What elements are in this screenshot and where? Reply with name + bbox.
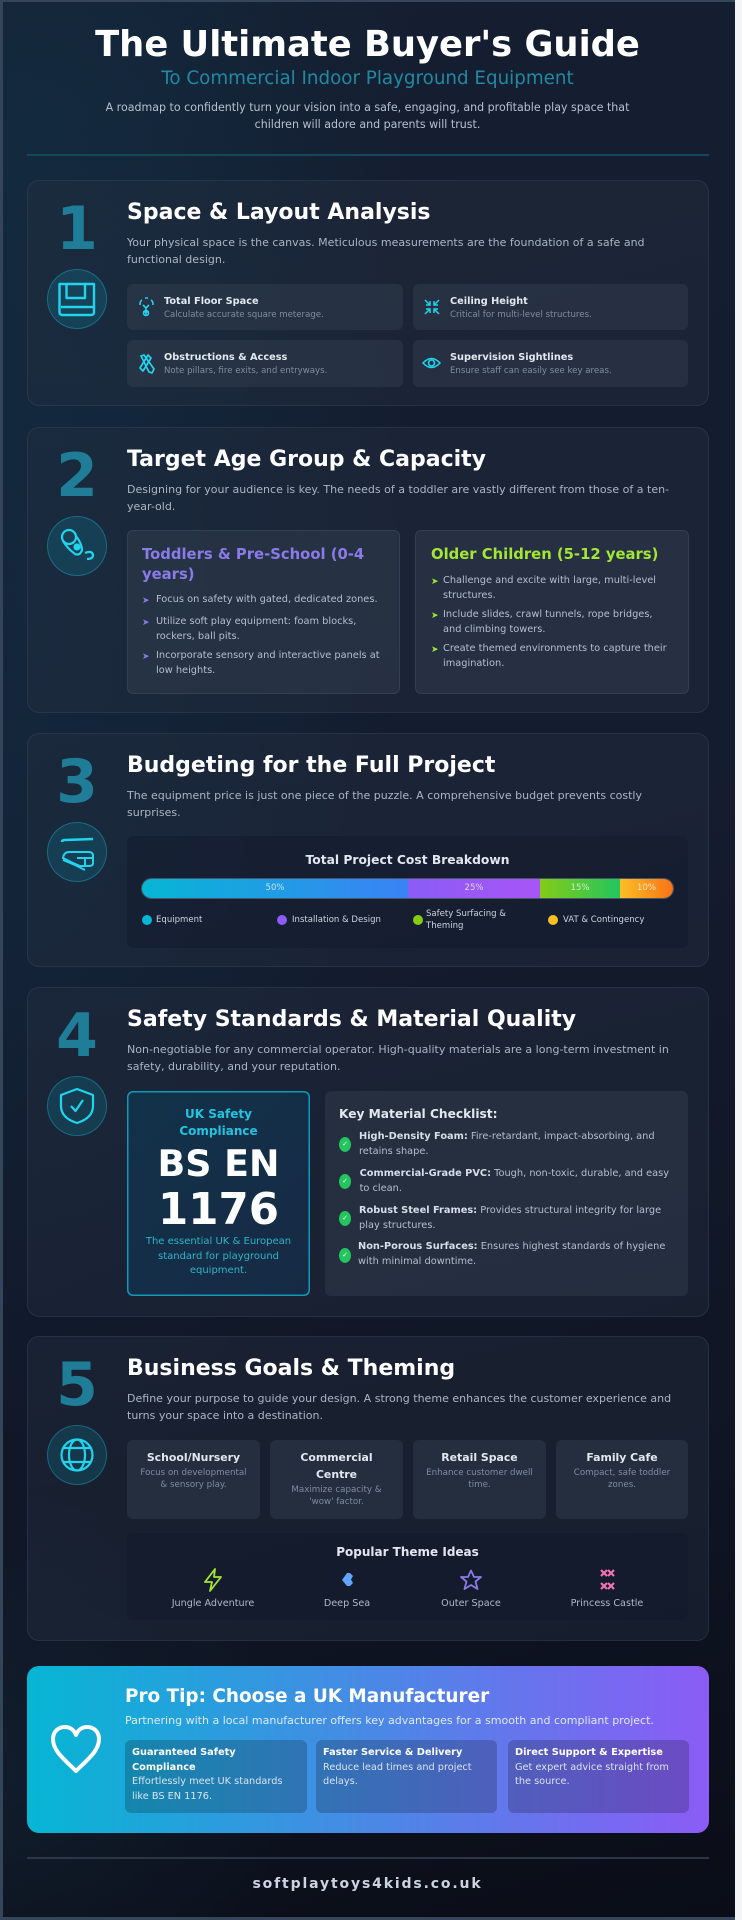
- card note: & sensory play.: [160, 1480, 227, 1490]
- card note: [140, 1468, 247, 1490]
- legend label: Installation & Design: [292, 915, 381, 925]
- legend dot: [277, 915, 287, 925]
- card text: Direct Support & Expertise: [515, 1747, 663, 1758]
- arrow: ➤: [431, 645, 439, 655]
- heading: Safety Standards & Material Quality: [127, 1007, 576, 1032]
- card: family cafe: [556, 1440, 688, 1519]
- card text: Compliance: [132, 1762, 196, 1773]
- card: ceiling height: [413, 284, 688, 330]
- legend dot: [548, 915, 558, 925]
- description: Define your purpose to guide your design. A strong theme enhances the customer experience and: [127, 1392, 671, 1404]
- card title: Commercial: [300, 1451, 373, 1464]
- card: faster service: [316, 1740, 497, 1813]
- description: The equipment price is just one piece of the puzzle. A comprehensive budget prevents costly: [127, 788, 642, 802]
- bullet: low heights.: [156, 665, 215, 676]
- step number 5: 5: [56, 1350, 98, 1420]
- note: Critical for multi-level structures.: [450, 310, 592, 320]
- bullet: [443, 609, 653, 635]
- card: older children: [415, 530, 689, 694]
- arrow: ➤: [431, 577, 439, 587]
- card title: Family Cafe: [586, 1451, 658, 1464]
- panel: key material checklist: [325, 1091, 688, 1296]
- icon: slide: [47, 822, 107, 882]
- panel: popular theme ideas: [127, 1533, 688, 1620]
- title: Total Floor Space: [164, 296, 259, 307]
- legend label: Equipment: [156, 915, 202, 925]
- step number 1: 1: [56, 194, 98, 264]
- check icon: [339, 1211, 351, 1226]
- description: turns your space into a destination.: [127, 1409, 323, 1422]
- standard name: BS EN: [158, 1142, 279, 1185]
- arrow: ➤: [431, 611, 439, 621]
- card note: Enhance customer dwell: [426, 1468, 533, 1478]
- bullet: [156, 650, 380, 676]
- icon: floor plan: [47, 269, 107, 329]
- segment: surfacing 15%: [540, 879, 620, 898]
- card text: [132, 1747, 282, 1802]
- intro text: children will adore and parents will trust.: [255, 118, 480, 131]
- bullet: [443, 643, 667, 669]
- chart title: Total Project Cost Breakdown: [306, 853, 509, 867]
- check icon: ✓: [342, 1251, 348, 1259]
- card text: [323, 1747, 472, 1787]
- icon: shield: [47, 1076, 107, 1136]
- callout note: [146, 1236, 291, 1276]
- card: obstructions: [127, 340, 403, 387]
- card title: Older Children (5-12 years): [431, 546, 658, 563]
- description: safety, durability, and your reputation.: [127, 1060, 340, 1073]
- step number 4: 4: [56, 1001, 98, 1071]
- theme label: Deep Sea: [324, 1598, 370, 1609]
- arrow: ➤: [142, 652, 150, 662]
- bullet: rockers, ball pits.: [156, 631, 240, 642]
- card: direct support: [508, 1740, 689, 1813]
- card text: Effortlessly meet UK standards: [132, 1776, 282, 1787]
- note: Note pillars, fire exits, and entryways.: [164, 366, 327, 376]
- segment: VAT 10%: [620, 879, 673, 898]
- icon: heart: [51, 1725, 101, 1774]
- icon: arrows: [424, 300, 440, 314]
- check icon: [339, 1174, 351, 1189]
- subtitle: To Commercial Indoor Playground Equipment: [161, 68, 574, 89]
- theme label: Outer Space: [441, 1598, 501, 1609]
- check icon: [339, 1248, 351, 1263]
- callout label: UK Safety: [185, 1107, 252, 1121]
- bullet: [443, 575, 656, 601]
- checklist item: [359, 1131, 655, 1157]
- card title: School/Nursery: [147, 1451, 240, 1464]
- bullet: Focus on safety with gated, dedicated zones.: [156, 594, 378, 605]
- checklist item: with minimal downtime.: [358, 1256, 476, 1267]
- card text: Guaranteed Safety: [132, 1747, 236, 1758]
- heading: Target Age Group & Capacity: [127, 447, 486, 472]
- description: surprises.: [127, 806, 181, 819]
- checklist item: Commercial-Grade PVC: Tough, non-toxic, durable, and easy: [360, 1168, 669, 1179]
- checklist item: [360, 1168, 669, 1194]
- card title: Retail Space: [441, 1451, 518, 1464]
- panel: section 1 space and layout: [27, 180, 709, 406]
- checklist title: Key Material Checklist:: [339, 1107, 498, 1121]
- card: toddlers: [127, 530, 400, 694]
- legend dot: [413, 915, 423, 925]
- card note: 'wow' factor.: [309, 1497, 364, 1507]
- description: Non-negotiable for any commercial operator. High-quality materials are a long-term investment in: [127, 1042, 669, 1056]
- icon: pacifier: [47, 516, 107, 576]
- icon: castle: [600, 1569, 615, 1590]
- check icon: ✓: [342, 1177, 348, 1185]
- check icon: [339, 1137, 351, 1152]
- card: total floor space: [127, 284, 403, 330]
- card text: [515, 1747, 669, 1787]
- title: The Ultimate Buyer's Guide: [95, 24, 640, 64]
- stacked bar: [142, 879, 673, 898]
- checklist item: Non-Porous Surfaces: Ensures highest standards of hygiene: [358, 1241, 665, 1252]
- callout: BS EN 1176: [127, 1091, 310, 1296]
- heading: Budgeting for the Full Project: [127, 753, 495, 778]
- standard number: 1176: [158, 1184, 279, 1234]
- icon: fish: [342, 1573, 353, 1586]
- card text: delays.: [323, 1776, 358, 1787]
- card note: Focus on developmental: [140, 1468, 247, 1478]
- bullet: Utilize soft play equipment: foam blocks,: [156, 616, 356, 627]
- icon: star: [460, 1570, 482, 1590]
- callout label: [179, 1107, 258, 1138]
- callout note: equipment.: [190, 1265, 247, 1276]
- theme label: Princess Castle: [571, 1598, 643, 1609]
- panel: section 3 budgeting: [27, 733, 709, 967]
- card title: [300, 1451, 373, 1481]
- tip heading: Pro Tip: Choose a UK Manufacturer: [125, 1686, 489, 1707]
- icon: bolt: [204, 1568, 222, 1592]
- card text: Reduce lead times and project: [323, 1762, 472, 1773]
- bullet: imagination.: [443, 658, 504, 669]
- icon: tools: [139, 354, 155, 374]
- bullet: and climbing towers.: [443, 624, 546, 635]
- bullet: Create themed environments to capture their: [443, 643, 667, 654]
- intro text: A roadmap to confidently turn your vision into a safe, engaging, and profitable play space that: [106, 101, 629, 114]
- legend label: [426, 909, 506, 931]
- checklist item: Robust Steel Frames: Provides structural integrity for large: [359, 1205, 661, 1216]
- card text: Faster Service & Delivery: [323, 1747, 462, 1758]
- step number 2: 2: [56, 441, 98, 511]
- checklist item: to clean.: [360, 1183, 402, 1194]
- card title: Centre: [316, 1468, 357, 1481]
- icon: eye: [422, 358, 441, 368]
- description: year-old.: [127, 500, 175, 513]
- segment: surfacing 15%: 15%: [571, 883, 589, 893]
- note: Ensure staff can easily see key areas.: [450, 366, 612, 376]
- description: [127, 1042, 669, 1073]
- segment: installation 25%: [408, 879, 540, 898]
- card text: the source.: [515, 1776, 570, 1787]
- card text: Get expert advice straight from: [515, 1762, 669, 1773]
- intro text: [106, 101, 630, 131]
- card note: zones.: [608, 1480, 636, 1490]
- theme label: Jungle Adventure: [172, 1598, 254, 1609]
- tip description: Partnering with a local manufacturer offers key advantages for a smooth and compliant project.: [125, 1714, 654, 1727]
- title: Supervision Sightlines: [450, 352, 573, 363]
- card: commercial centre: [270, 1440, 403, 1519]
- pro tip banner: [27, 1666, 709, 1833]
- description: [127, 236, 645, 266]
- heading: Business Goals & Theming: [127, 1356, 455, 1381]
- check icon: ✓: [342, 1214, 348, 1222]
- title: Obstructions & Access: [164, 352, 287, 363]
- description: Designing for your audience is key. The needs of a toddler are vastly different from those of a ten-: [127, 482, 669, 496]
- card title: Toddlers & Pre-School (0-4: [142, 546, 364, 563]
- checklist item: retains shape.: [359, 1146, 429, 1157]
- panel: section 2 target age group: [27, 427, 709, 713]
- panel: section 5 business goals: [27, 1336, 709, 1641]
- icon: floor: [139, 297, 154, 316]
- chart: total project cost breakdown: [127, 836, 688, 948]
- title: Ceiling Height: [450, 296, 528, 307]
- legend label: Safety Surfacing &: [426, 909, 506, 919]
- card note: time.: [468, 1480, 491, 1490]
- checklist item: play structures.: [359, 1220, 436, 1231]
- callout label: Compliance: [179, 1124, 258, 1138]
- check icon: ✓: [342, 1140, 348, 1148]
- description: [126, 788, 642, 819]
- footer website: softplaytoys4kids.co.uk: [252, 1876, 483, 1892]
- card note: [426, 1468, 533, 1490]
- card: retail space: [413, 1440, 546, 1519]
- bullet: Challenge and excite with large, multi-level: [443, 575, 656, 586]
- card note: Compact, safe toddler: [574, 1468, 670, 1478]
- checklist item: [359, 1205, 661, 1231]
- card note: [574, 1468, 670, 1490]
- callout note: The essential UK & European: [146, 1236, 291, 1247]
- segment: equipment 50%: 50%: [266, 883, 284, 893]
- arrow: ➤: [142, 618, 150, 628]
- note: Calculate accurate square meterage.: [164, 310, 324, 320]
- theme title: Popular Theme Ideas: [336, 1545, 479, 1559]
- legend label: VAT & Contingency: [563, 915, 644, 925]
- arrow: ➤: [142, 596, 150, 606]
- card title: [142, 546, 364, 583]
- card note: [291, 1485, 382, 1507]
- bullet: Include slides, crawl tunnels, rope bridges,: [443, 609, 653, 620]
- card title: years): [142, 566, 195, 583]
- bullet: Incorporate sensory and interactive panels at: [156, 650, 380, 661]
- description: [127, 1392, 671, 1422]
- callout note: standard for playground: [158, 1251, 279, 1262]
- segment: equipment 50%: [142, 879, 408, 898]
- bullet: [156, 616, 356, 642]
- card: school nursery: [127, 1440, 260, 1519]
- checklist item: [358, 1241, 665, 1267]
- checklist item: High-Density Foam: Fire-retardant, impact-absorbing, and: [359, 1131, 655, 1142]
- card text: like BS EN 1176.: [132, 1791, 212, 1802]
- legend label: Theming: [426, 921, 463, 931]
- description: Your physical space is the canvas. Meticulous measurements are the foundation of a safe and: [127, 236, 645, 248]
- card: supervision sightlines: [413, 340, 688, 387]
- icon: globe: [47, 1425, 107, 1485]
- panel: section 4 safety standards: [27, 987, 709, 1317]
- description: functional design.: [127, 253, 225, 266]
- segment: installation 25%: 25%: [465, 883, 483, 893]
- card note: Maximize capacity &: [291, 1485, 382, 1495]
- segment: VAT 10%: 10%: [637, 883, 656, 893]
- card: guaranteed safety: [125, 1740, 307, 1813]
- step number 3: 3: [56, 747, 98, 817]
- bullet: structures.: [443, 590, 496, 601]
- legend dot: [142, 915, 152, 925]
- description: [127, 482, 669, 513]
- heading: Space & Layout Analysis: [127, 200, 431, 225]
